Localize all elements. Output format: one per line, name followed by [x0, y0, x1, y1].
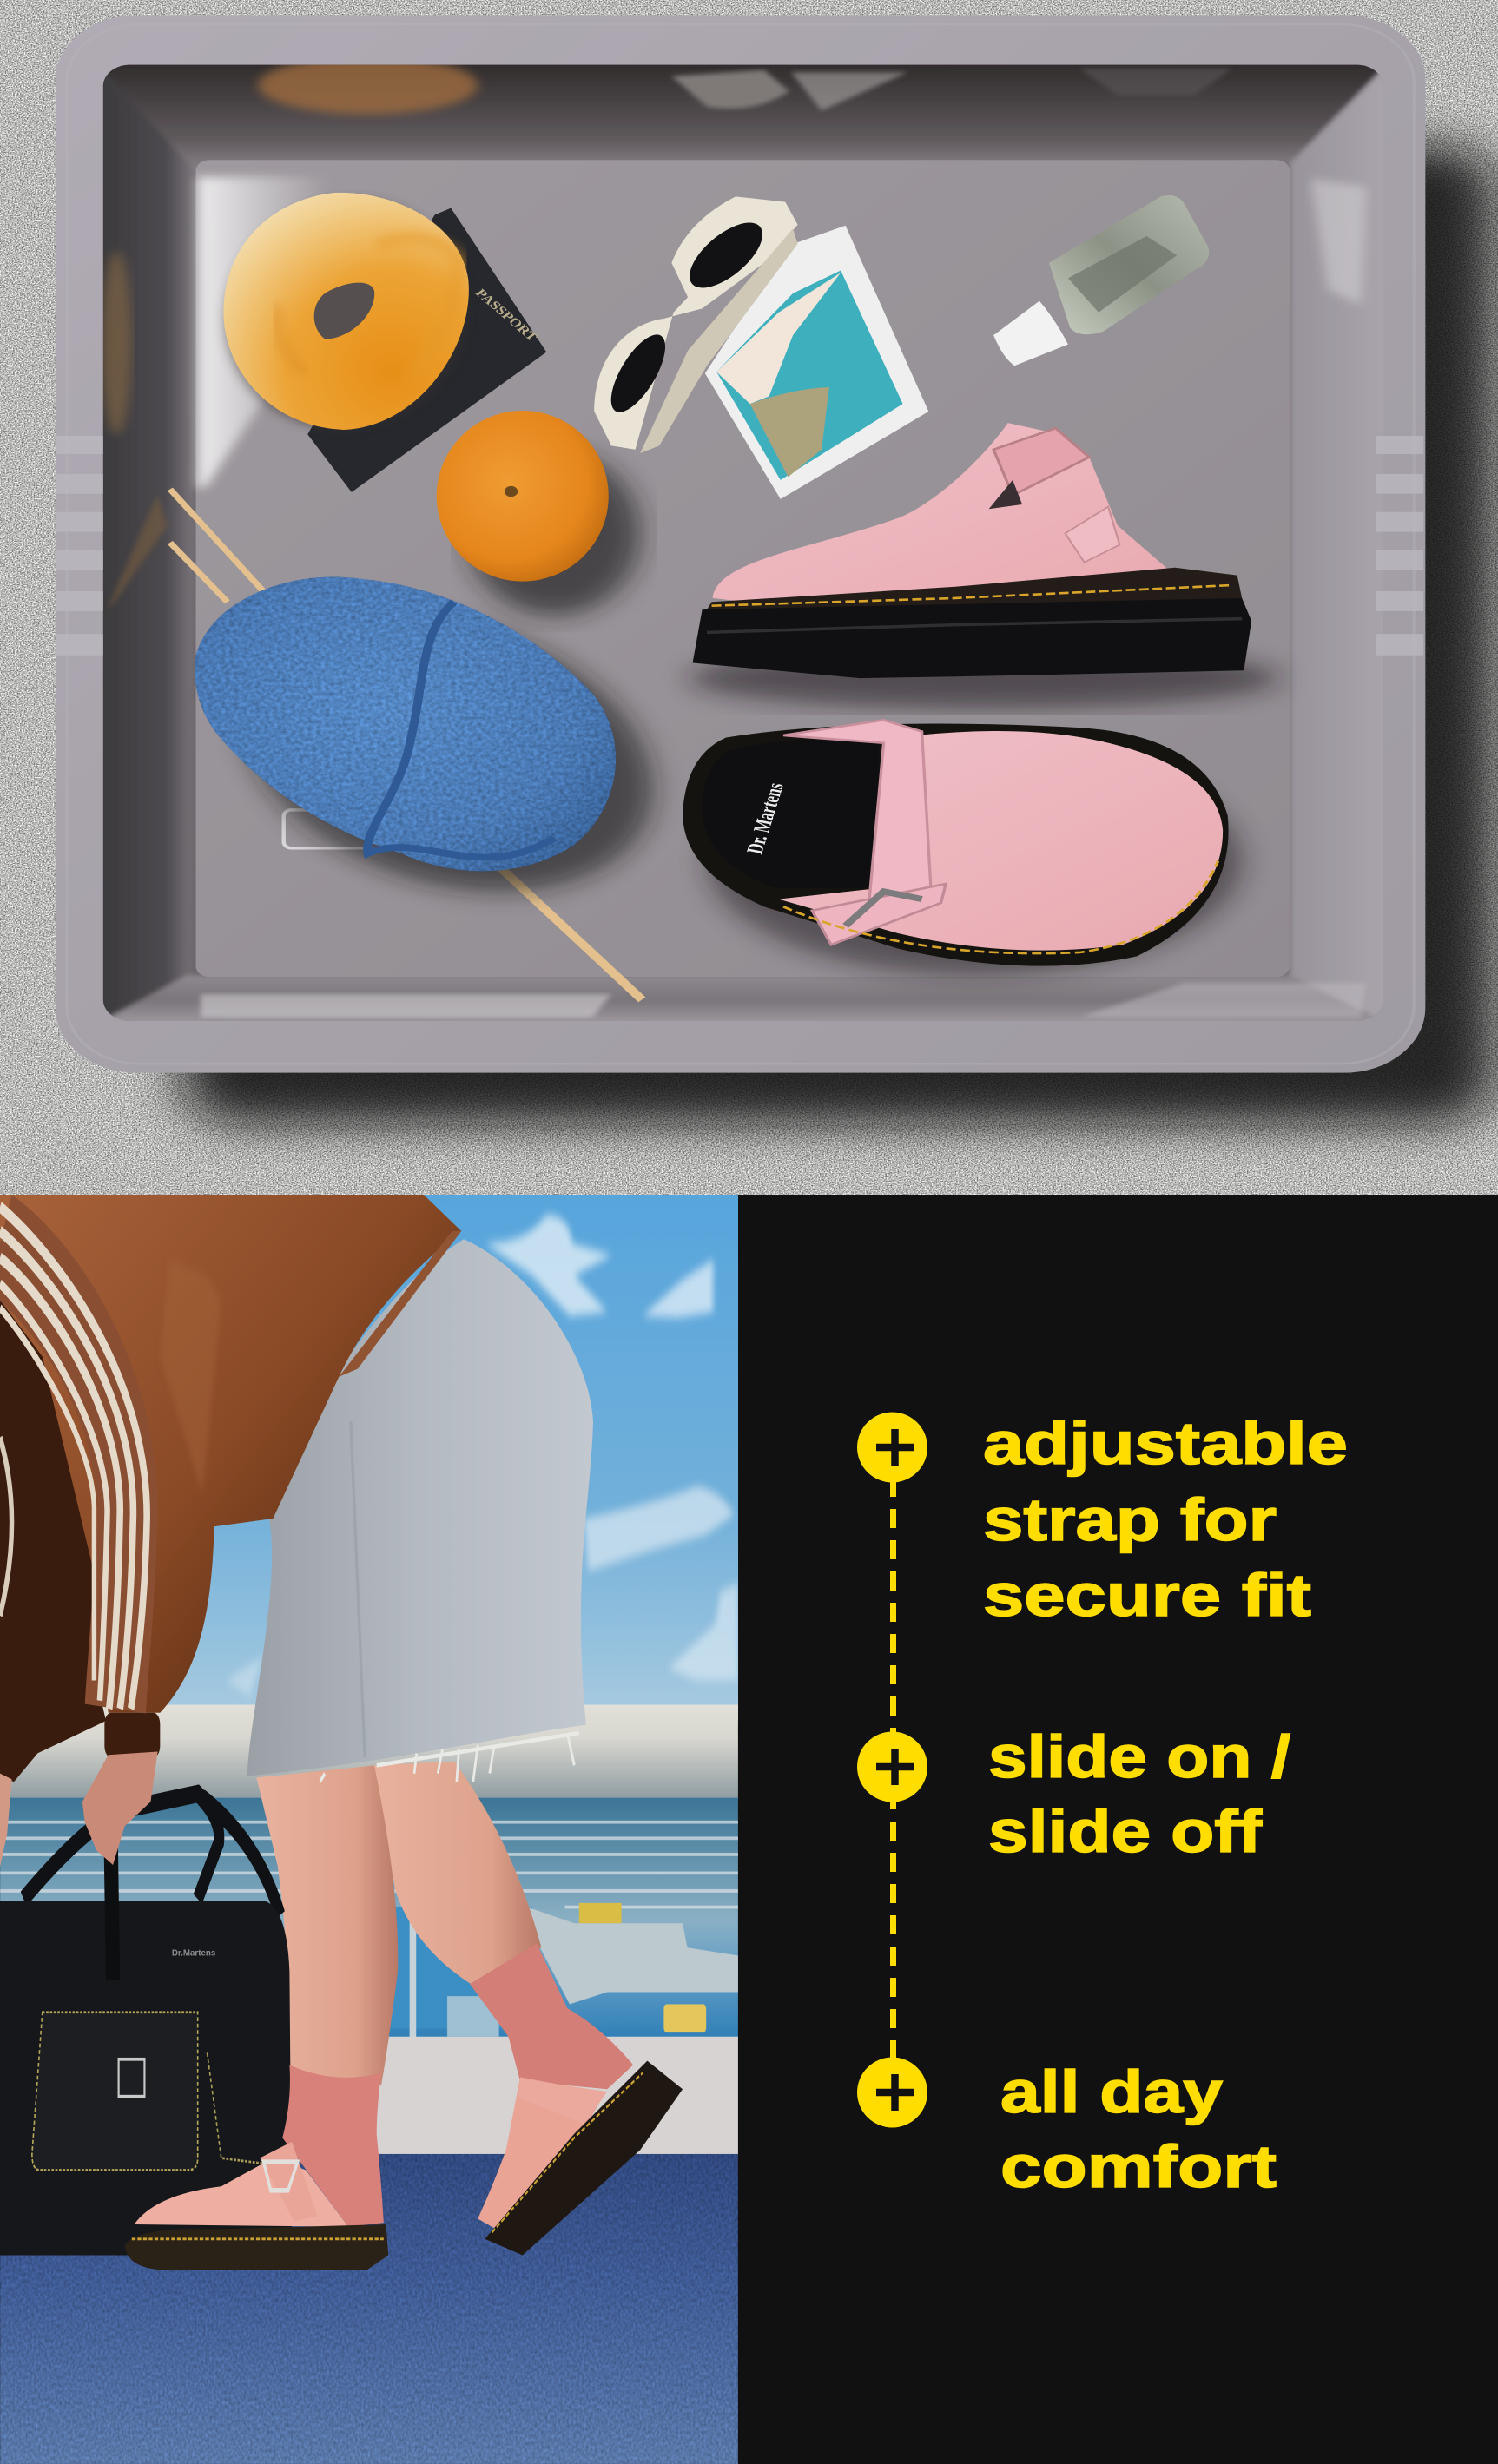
blue yarn ball [185, 563, 713, 945]
knitting needles [170, 489, 642, 999]
top view mule shoe [683, 720, 1242, 975]
sky with clouds [0, 1195, 738, 1721]
pavement [0, 2037, 738, 2157]
airport terminal building [0, 1704, 738, 2040]
bagel [207, 186, 485, 442]
feature: adjustable strap for secure fit: adjustable [983, 1410, 1348, 1477]
polaroid photo [705, 226, 928, 499]
feature: slide on / slide off [988, 1723, 1290, 1865]
panel: product flat lay photo [0, 0, 1498, 1195]
passport [307, 208, 546, 492]
far leg [372, 1762, 541, 1984]
side view mule shoe [688, 423, 1280, 708]
wrist [0, 1774, 12, 1867]
feature: all day comfort [1000, 2059, 1277, 2200]
orange [437, 411, 640, 616]
brown satin jacket [0, 1195, 461, 1782]
far mule shoe [478, 2061, 683, 2255]
wall reflections [258, 56, 478, 115]
panel: black feature list [738, 1195, 1498, 2464]
feature: adjustable strap for secure fit: secure fit [983, 1562, 1311, 1629]
grey plastic tray [56, 16, 1425, 1073]
nail polish bottle [993, 195, 1209, 366]
passport: PASSPORT [472, 287, 540, 344]
sleeve stripes [0, 1207, 147, 1709]
feature: slide on / slide off: slide off [988, 1798, 1263, 1865]
hand gripping bag [82, 1751, 158, 1865]
far sock [470, 1943, 633, 2089]
sunglasses [594, 196, 798, 453]
feature: all day comfort: all day [1000, 2059, 1223, 2125]
dashed timeline [890, 1478, 896, 2059]
right handle ridges [1376, 436, 1423, 656]
near sock [282, 2065, 384, 2227]
black leather duffel bag: Dr.Martens [172, 1948, 216, 1959]
grey skirt [247, 1239, 593, 1776]
near mule shoe [125, 2142, 388, 2270]
black leather duffel bag [0, 1794, 292, 2255]
top view mule shoe: Dr. Martens [742, 781, 789, 856]
floor highlight [198, 177, 330, 488]
tray drop shadow [181, 145, 1495, 1123]
speckled grey surface [0, 0, 1498, 1195]
blue carpet [0, 2154, 738, 2464]
icon: plus 2 [857, 1731, 927, 1802]
left handle ridges [56, 436, 103, 656]
icon: plus 1 [857, 1412, 927, 1483]
feature: slide on / slide off: slide on / [988, 1723, 1290, 1790]
feature: all day comfort: comfort [1000, 2133, 1277, 2200]
frayed hem [320, 1733, 579, 1782]
skirt seam [351, 1421, 365, 1757]
feature: adjustable strap for secure fit [983, 1410, 1348, 1629]
near leg [256, 1765, 398, 2085]
feature: adjustable strap for secure fit: strap for [983, 1486, 1277, 1553]
icon: plus 3 [857, 2058, 927, 2127]
panel: lifestyle photo [0, 1195, 738, 2464]
